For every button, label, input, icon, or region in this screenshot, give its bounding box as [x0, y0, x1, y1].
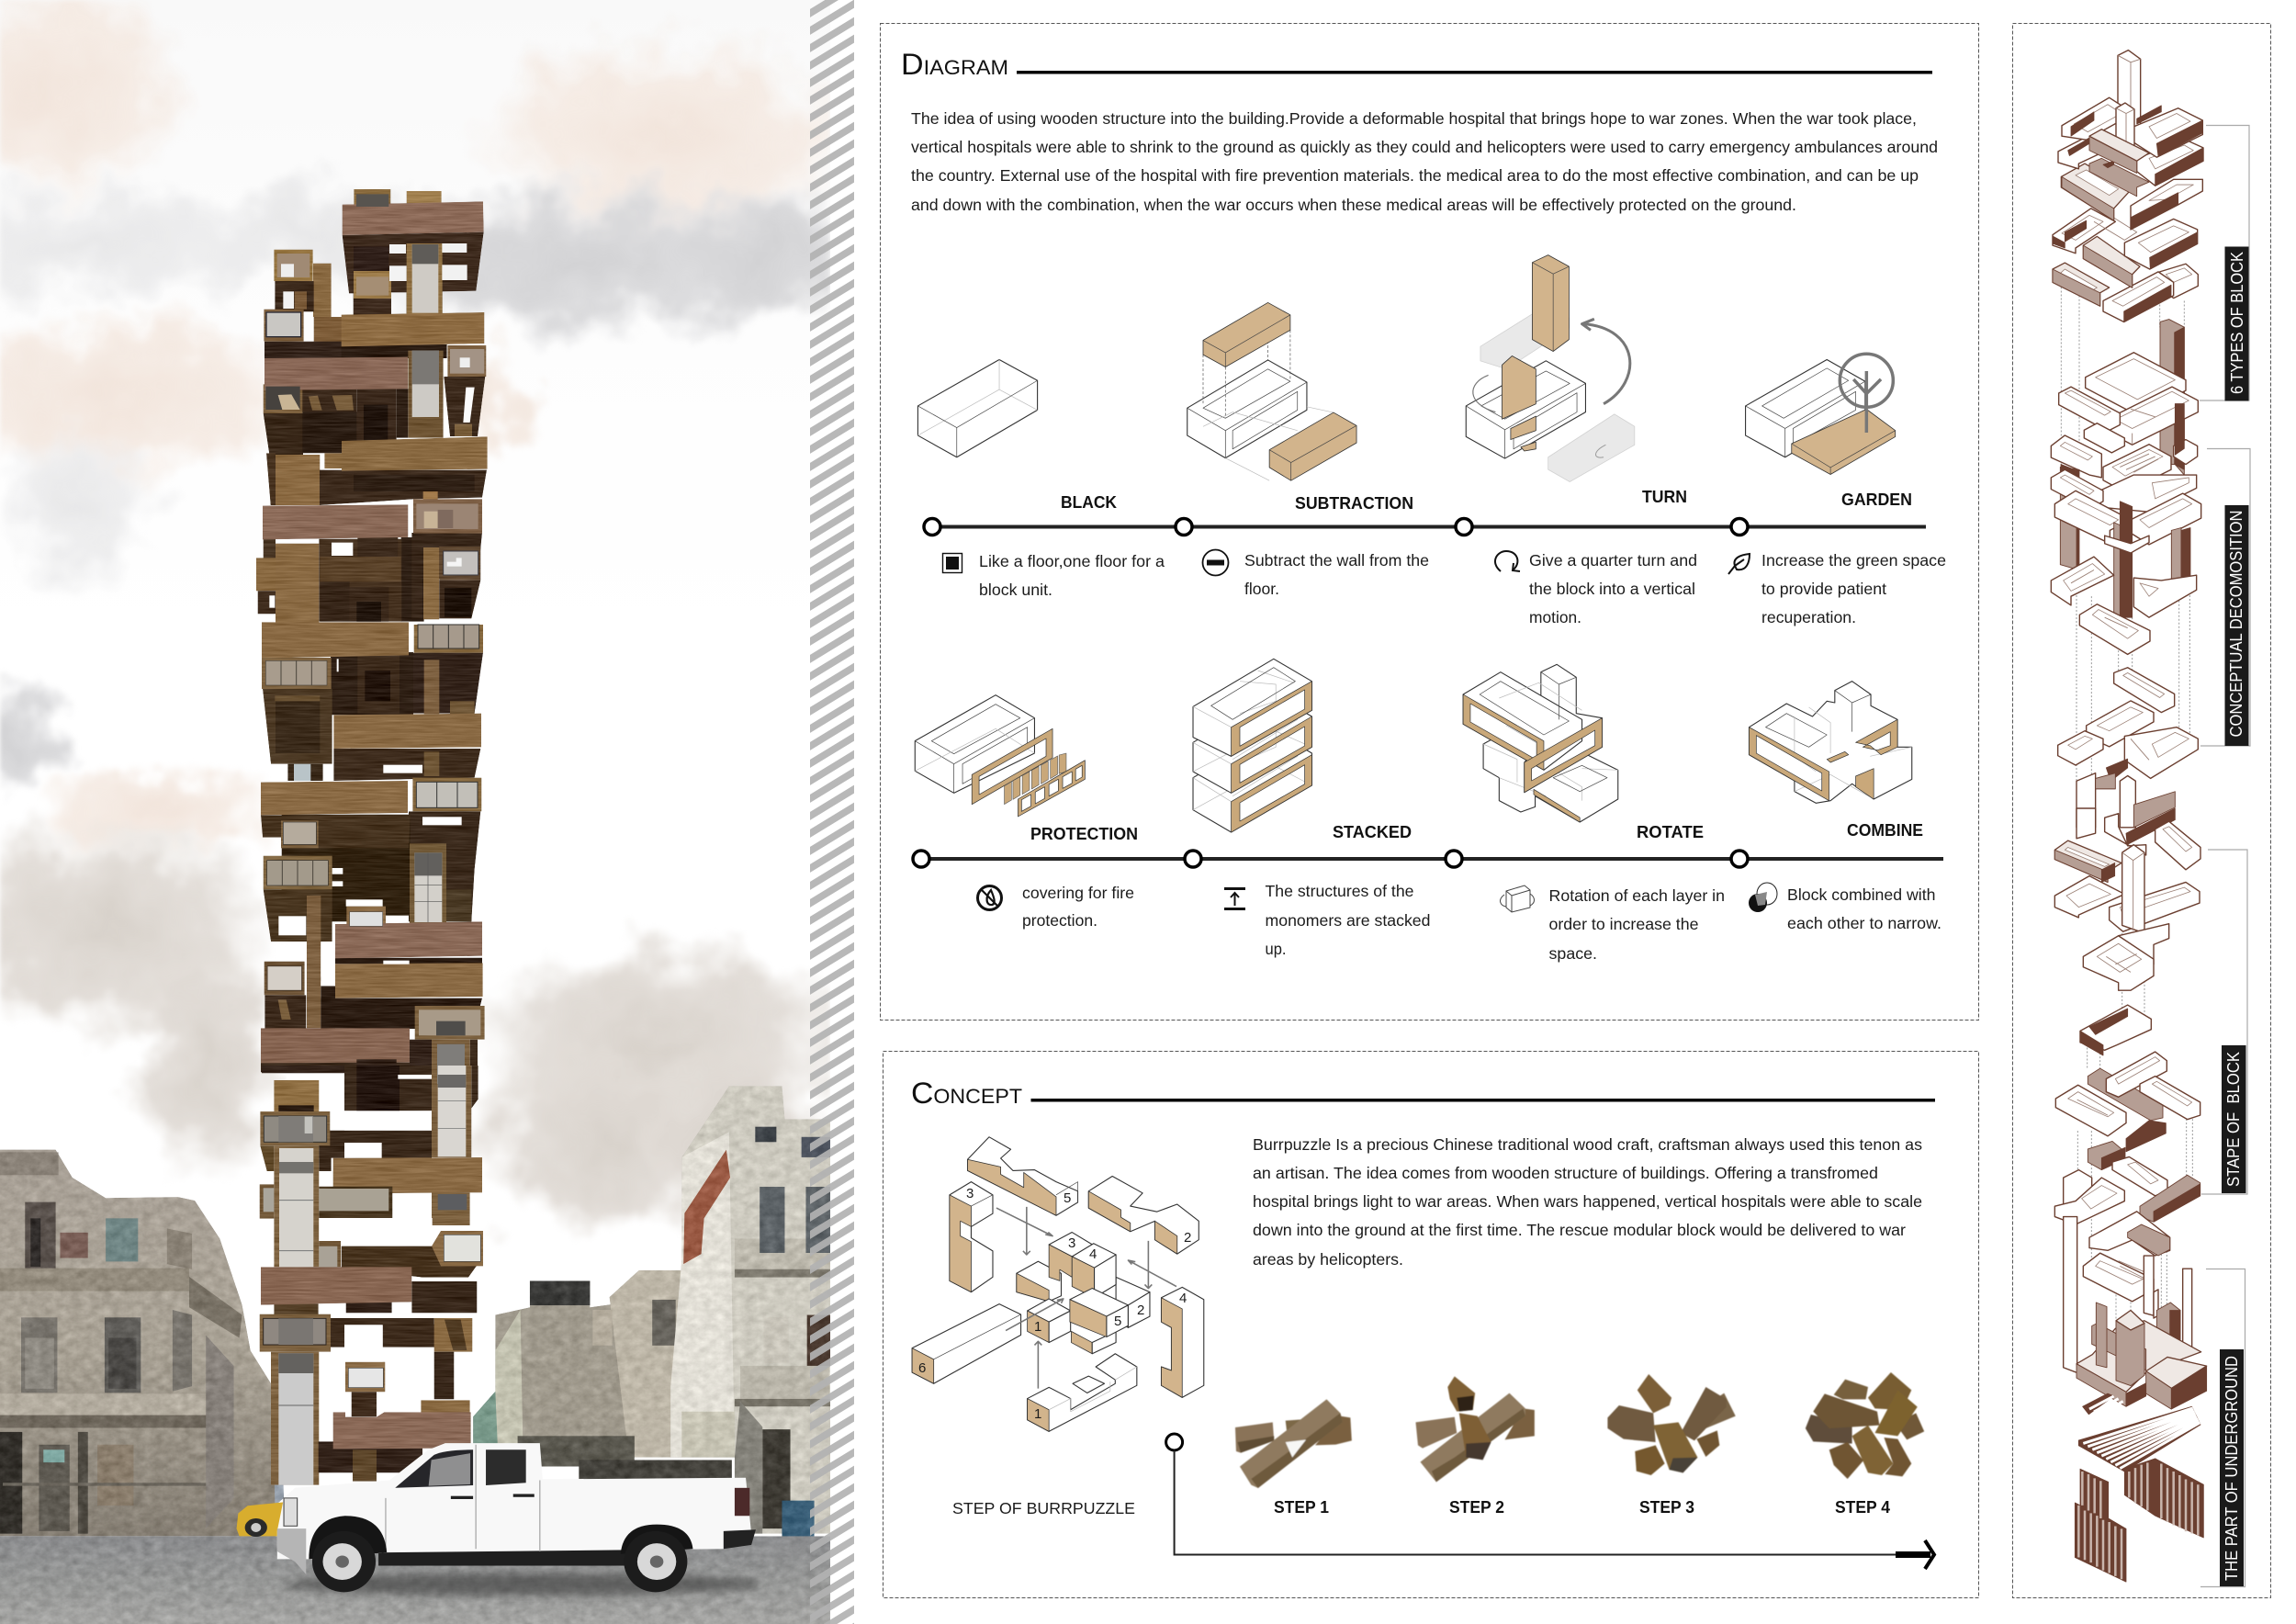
description: subtraction: floor. — [1244, 580, 1279, 598]
description: turn: Give a quarter turn and — [1529, 551, 1697, 570]
step captions: STEP 3 — [1639, 1498, 1694, 1517]
layer C — [2061, 164, 2202, 230]
timeline 2 — [913, 851, 1943, 867]
description: black — [979, 552, 1165, 599]
label: the part of underground: THE PART OF UNDERGROUND — [2223, 1356, 2241, 1581]
icon: rotate — [1495, 551, 1520, 571]
description: black: block unit. — [979, 581, 1052, 599]
ground shadow — [284, 1573, 762, 1596]
puzzle part numbers: 1 — [1034, 1406, 1041, 1422]
panel: exploded axonometric — [2013, 24, 2270, 1598]
panel border — [2013, 24, 2270, 1598]
assembled centre — [1017, 1233, 1150, 1354]
exploded lower layers — [2054, 808, 2207, 1582]
front wheel — [312, 1531, 376, 1592]
exploded upper layers — [2051, 51, 2203, 828]
piece 1 — [1028, 1354, 1137, 1431]
puzzle part numbers — [918, 1186, 1191, 1422]
concept paragraph: hospital brings light to war areas. When wars happened, vertical hospitals were able to scale — [1253, 1192, 1922, 1211]
description: garden — [1761, 551, 1946, 626]
step labels row 1: BLACK — [1061, 493, 1117, 512]
drawing: rotate — [1463, 664, 1618, 822]
puzzle part numbers: 2 — [1184, 1230, 1191, 1246]
description: protection: covering for fire — [1022, 884, 1134, 902]
concept paragraph — [1253, 1135, 1922, 1269]
heading: concept: Concept — [911, 1077, 1022, 1110]
ruined corner building left — [0, 1150, 276, 1536]
description: combine: each other to narrow. — [1787, 914, 1941, 932]
photo: step 1 — [1235, 1399, 1352, 1488]
panel border — [880, 24, 1978, 1020]
panel: concept — [884, 1051, 1978, 1598]
tower and tray — [2054, 1170, 2170, 1372]
tower glazing and openings — [264, 194, 484, 1485]
photo: step 3 — [1607, 1374, 1736, 1475]
step captions: STEP 2 — [1449, 1498, 1504, 1517]
burr puzzle exploded diagram — [912, 1137, 1204, 1431]
sky background — [0, 0, 830, 1624]
description: garden: recuperation. — [1761, 608, 1856, 626]
puzzle part numbers: 5 — [1064, 1190, 1071, 1206]
icon: combined circles — [1749, 883, 1777, 912]
mid tray with dark faces — [2088, 1121, 2200, 1222]
icon: stack up — [1224, 887, 1245, 910]
intro paragraph: and down with the combination, when the war occurs when these medical areas will be effectively protected on the ground. — [911, 196, 1796, 214]
drawing: stacked — [1193, 659, 1311, 832]
step labels row 2: ROTATE — [1637, 823, 1704, 841]
piece 3 — [950, 1182, 993, 1292]
description: rotate — [1548, 886, 1725, 963]
panel border — [884, 1051, 1978, 1598]
description: black: Like a floor,one floor for a — [979, 552, 1165, 570]
layer E — [2053, 263, 2198, 321]
distant colourful houses left — [240, 1350, 284, 1536]
description: rotate: space. — [1548, 944, 1597, 963]
tall building right — [670, 1086, 830, 1541]
middle ruined buildings — [473, 1270, 681, 1458]
step captions: STEP 4 — [1835, 1498, 1890, 1517]
chassis — [378, 1546, 629, 1566]
white pickup truck — [277, 1443, 762, 1596]
concept paragraph: an artisan. The idea comes from wooden structure of buildings. Offering a transfromed — [1253, 1164, 1878, 1182]
label: stape of block: STAPE OF BLOCK — [2224, 1052, 2243, 1187]
icon: rotating cube — [1501, 885, 1534, 912]
description: rotate: Rotation of each layer in — [1548, 886, 1725, 905]
description: subtraction — [1244, 551, 1429, 598]
top block group — [2053, 51, 2203, 321]
concept paragraph: areas by helicopters. — [1253, 1250, 1403, 1269]
rear wheel — [624, 1531, 687, 1592]
layer B — [2058, 134, 2203, 197]
concept paragraph: down into the ground at the first time. The rescue modular block would be delivered to war — [1253, 1221, 1906, 1239]
description: protection — [1022, 884, 1134, 930]
drawing: turn — [1466, 255, 1635, 482]
dark low truck behind — [518, 1436, 732, 1482]
panel: diagram — [880, 24, 1978, 1020]
description: stacked: The structures of the — [1266, 882, 1414, 900]
drawing: garden — [1746, 354, 1896, 474]
layer A — [2062, 97, 2202, 173]
isometric row 2 — [915, 659, 1912, 832]
label: 6 types of block: 6 TYPES OF BLOCK — [2228, 252, 2246, 394]
piece 6 — [912, 1304, 1021, 1383]
description: garden: to provide patient — [1761, 580, 1886, 598]
lower block group — [2058, 668, 2198, 828]
heading: diagram: Diagram — [901, 48, 1008, 81]
puzzle part numbers: 1 — [1034, 1319, 1041, 1335]
description: rotate: order to increase the — [1548, 915, 1699, 933]
intro paragraph — [911, 109, 1938, 214]
middle block group — [2051, 320, 2201, 654]
intro paragraph: the country. External use of the hospital with fire prevention materials. the medical area to do the most effective combination, and can be up — [911, 166, 1919, 185]
heading: concept — [911, 1077, 1935, 1110]
piece 2 — [1088, 1177, 1199, 1254]
layer D — [2053, 209, 2198, 288]
concept paragraph: Burrpuzzle Is a precious Chinese traditional wood craft, craftsman always used this tenon as — [1253, 1135, 1922, 1154]
description: protection: protection. — [1022, 911, 1097, 930]
icon: minus circle — [1203, 549, 1229, 575]
step labels row 1: GARDEN — [1841, 491, 1912, 509]
isometric row 1 — [917, 255, 1896, 482]
intro paragraph: The idea of using wooden structure into the building.Provide a deformable hospital that brings hope to war zones. When the war took place, — [911, 109, 1917, 128]
step labels row 2: PROTECTION — [1030, 825, 1138, 843]
underground block — [2077, 1269, 2207, 1409]
truck body — [277, 1443, 751, 1559]
piece 5 — [968, 1137, 1078, 1215]
timeline arrow — [1166, 1434, 1934, 1569]
puzzle part numbers: 5 — [1114, 1314, 1121, 1329]
description: turn: the block into a vertical — [1529, 580, 1695, 598]
step labels row 2: STACKED — [1333, 823, 1412, 841]
photo: step 4 — [1806, 1372, 1924, 1479]
timeline 1 — [924, 518, 1926, 535]
stacked tray group 1 — [2054, 808, 2200, 990]
assembly arrows — [996, 1207, 1176, 1389]
puzzle part numbers: 2 — [1137, 1303, 1144, 1318]
description: turn — [1529, 551, 1697, 626]
step captions: STEP 1 — [1274, 1498, 1329, 1517]
puzzle part numbers: 4 — [1179, 1291, 1187, 1306]
description: stacked — [1266, 882, 1431, 958]
drawing: protection — [915, 695, 1085, 817]
watercolour clouds — [0, 0, 882, 1235]
photo: step 2 — [1415, 1376, 1535, 1482]
street background buildings — [0, 1086, 830, 1624]
dark tray — [2080, 1005, 2151, 1055]
step labels row 2 — [1030, 821, 1923, 843]
icon: leaf — [1728, 554, 1750, 574]
icon: no fire — [977, 885, 1001, 909]
puzzle part numbers: 4 — [1089, 1246, 1097, 1262]
step labels row 1 — [1061, 488, 1912, 513]
description: stacked: monomers are stacked — [1266, 911, 1431, 930]
diagonal hatch strip — [810, 0, 854, 1624]
yellow car — [237, 1502, 284, 1537]
intro paragraph: vertical hospitals were able to shrink to the ground as quickly as they could and helicopters were used to carry emergency ambulances around — [911, 138, 1938, 156]
heading: diagram — [901, 48, 1932, 81]
step labels row 1: SUBTRACTION — [1295, 494, 1413, 513]
description: combine — [1787, 885, 1941, 932]
step labels row 2: COMBINE — [1847, 821, 1923, 840]
description: garden: Increase the green space — [1761, 551, 1946, 570]
tower — [256, 189, 488, 1485]
timber fins — [2075, 1459, 2203, 1582]
panel: hero render of tower in the street — [0, 0, 882, 1624]
label: step of burrpuzzle: STEP OF BURRPUZZLE — [952, 1499, 1135, 1517]
puzzle part numbers: 3 — [966, 1186, 974, 1201]
bracket lines — [2200, 125, 2250, 1587]
description: subtraction: Subtract the wall from the — [1244, 551, 1429, 570]
puzzle part numbers: 3 — [1068, 1235, 1075, 1251]
icon: black square — [942, 553, 962, 573]
timber slats — [2078, 1393, 2200, 1472]
ground — [0, 1536, 830, 1624]
white trays — [2055, 1052, 2200, 1136]
description: combine: Block combined with — [1787, 885, 1936, 904]
label: conceptual decomposition: CONCEPTUAL DECOMOSITION — [2227, 511, 2245, 737]
drawing: subtraction — [1187, 302, 1356, 480]
description: turn: motion. — [1529, 608, 1581, 626]
step labels row 1: TURN — [1642, 488, 1687, 506]
drawing: black — [917, 359, 1038, 457]
puzzle part numbers: 6 — [918, 1360, 926, 1376]
drawing: combine — [1749, 682, 1912, 803]
step captions — [1274, 1498, 1890, 1517]
piece 4 — [1162, 1287, 1204, 1397]
description: stacked: up. — [1266, 940, 1286, 958]
